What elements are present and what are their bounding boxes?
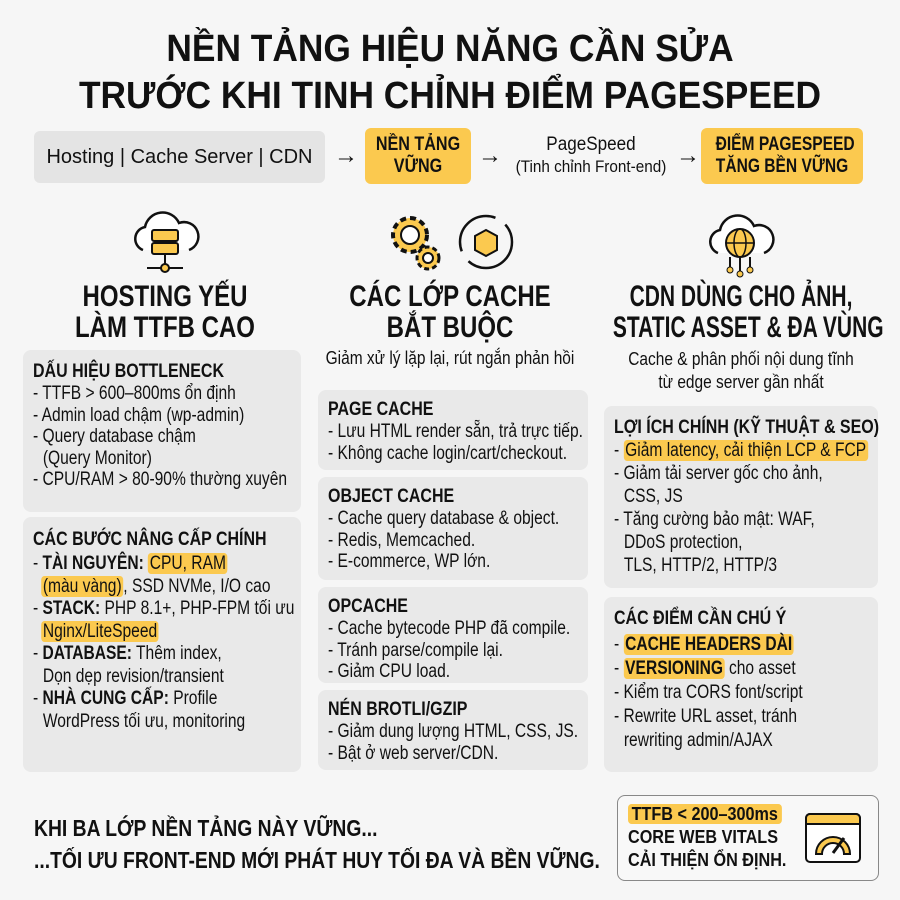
column 2 heading: [349, 280, 551, 344]
panel: CDN benefits: - Giảm tải server gốc cho ảnh,: [614, 463, 823, 484]
panel: upgrade steps: - DATABASE: Thêm index,: [33, 643, 222, 664]
flow: result: ĐIỂM PAGESPEED: [716, 134, 855, 155]
panel: bottleneck signs: [23, 350, 301, 512]
panel: opcache: - Cache bytecode PHP đã compile.: [328, 618, 570, 639]
panel: CDN notes: CÁC ĐIỂM CẦN CHÚ Ý: [614, 607, 786, 629]
panel: brotli: - Giảm dung lượng HTML, CSS, JS.: [328, 721, 578, 742]
bottom conclusion text: KHI BA LỚP NỀN TẢNG NÀY VỮNG...: [34, 815, 377, 841]
flow: pagespeed: PageSpeed: [546, 134, 636, 155]
icon: gears and box: [391, 214, 514, 270]
column 3 subtitle: từ edge server gần nhất: [658, 372, 824, 392]
panel: CDN benefits: LỢI ÍCH CHÍNH (KỸ THUẬT & SEO): [614, 416, 879, 438]
panel: bottleneck signs: - Admin load chậm (wp-admin): [33, 404, 244, 426]
panel: object cache: - Cache query database & object.: [328, 508, 559, 529]
panel: page cache: PAGE CACHE: [328, 398, 433, 420]
panel: upgrade steps: CÁC BƯỚC NÂNG CẤP CHÍNH: [33, 528, 267, 550]
column 2 heading: CÁC LỚP CACHE: [349, 280, 551, 313]
panel: opcache: OPCACHE: [328, 595, 408, 617]
panel: bottleneck signs: - Query database chậm: [33, 426, 196, 447]
bottom conclusion text: [34, 815, 600, 873]
panel: CDN notes: - CACHE HEADERS DÀI: [614, 634, 792, 655]
panel: CDN notes: [604, 597, 878, 772]
result callout box: [617, 795, 879, 881]
arrow: →: [478, 142, 502, 169]
column 1 heading: [75, 280, 255, 344]
panel: brotli: - Bật ở web server/CDN.: [328, 742, 498, 764]
panel: bottleneck signs: (Query Monitor): [43, 448, 152, 468]
flow: foundation: [365, 128, 471, 184]
column 1 heading: HOSTING YẾU: [83, 280, 247, 313]
column 3 heading: STATIC ASSET & ĐA VÙNG: [613, 311, 884, 344]
icon: gauge window: [805, 813, 861, 863]
arrow: →: [676, 142, 700, 169]
panel: opcache: - Tránh parse/compile lại.: [328, 640, 503, 660]
panel: upgrade steps: [23, 517, 301, 772]
panel: CDN notes: rewriting admin/AJAX: [624, 730, 773, 751]
panel: upgrade steps: (màu vàng), SSD NVMe, I/O cao: [43, 576, 270, 596]
icon: cloud globe: [709, 214, 775, 278]
panel: CDN benefits: [604, 406, 878, 588]
panel: upgrade steps: - STACK: PHP 8.1+, PHP-FPM tối ưu: [33, 598, 294, 619]
panel: bottleneck signs: - TTFB > 600–800ms ổn định: [33, 383, 236, 404]
panel: CDN notes: - Rewrite URL asset, tránh: [614, 706, 797, 727]
column 3 subtitle: [628, 349, 854, 392]
flow: hosting box: Hosting | Cache Server | CDN: [46, 146, 313, 168]
column 3 heading: CDN DÙNG CHO ẢNH,: [630, 280, 852, 313]
flow: result: [701, 128, 863, 184]
column 2 subtitle: Giảm xử lý lặp lại, rút ngắn phản hồi: [326, 348, 574, 368]
arrow: →: [334, 142, 358, 169]
panel: CDN notes: - Kiểm tra CORS font/script: [614, 682, 803, 703]
panel: page cache: [318, 390, 588, 470]
column 1 heading: LÀM TTFB CAO: [75, 311, 255, 344]
column 2 heading: BẮT BUỘC: [387, 311, 513, 344]
panel: page cache: - Lưu HTML render sẵn, trả trực tiếp.: [328, 421, 583, 442]
panel: CDN benefits: DDoS protection,: [624, 532, 742, 553]
panel: object cache: - Redis, Memcached.: [328, 530, 475, 550]
panel: object cache: - E-commerce, WP lớn.: [328, 551, 490, 572]
panel: upgrade steps: - TÀI NGUYÊN: CPU, RAM: [33, 553, 226, 574]
flow row: [34, 128, 863, 184]
callout text: CORE WEB VITALS: [628, 827, 778, 847]
panel: brotli: [318, 690, 588, 770]
panel: page cache: - Không cache login/cart/checkout.: [328, 442, 567, 464]
panel: brotli: NÉN BROTLI/GZIP: [328, 698, 467, 720]
panel: CDN notes: - VERSIONING cho asset: [614, 658, 796, 679]
panel: CDN benefits: TLS, HTTP/2, HTTP/3: [624, 555, 777, 576]
flow: foundation: NỀN TẢNG: [376, 134, 460, 155]
panel: upgrade steps: - NHÀ CUNG CẤP: Profile: [33, 688, 217, 709]
flow: foundation: VỮNG: [394, 156, 442, 177]
flow: hosting box: [34, 131, 325, 183]
callout text: TTFB < 200–300ms: [632, 804, 778, 824]
panel: upgrade steps: WordPress tối ưu, monitoring: [43, 710, 245, 732]
panel: object cache: OBJECT CACHE: [328, 485, 454, 507]
panel: upgrade steps: Dọn dẹp revision/transient: [43, 666, 224, 686]
column 3 subtitle: Cache & phân phối nội dung tĩnh: [628, 349, 854, 369]
callout text: [628, 804, 786, 870]
icon: cloud server: [134, 211, 200, 273]
panel: upgrade steps: Nginx/LiteSpeed: [43, 620, 157, 642]
panel: opcache: - Giảm CPU load.: [328, 661, 450, 682]
panel: bottleneck signs: DẤU HIỆU BOTTLENECK: [33, 360, 224, 382]
flow: pagespeed: [516, 134, 666, 176]
bottom conclusion text: ...TỐI ƯU FRONT-END MỚI PHÁT HUY TỐI ĐA VÀ BỀN VỮNG.: [34, 847, 600, 873]
panel: bottleneck signs: - CPU/RAM > 80-90% thường xuyên: [33, 469, 287, 490]
panel: CDN benefits: CSS, JS: [624, 486, 683, 507]
title: TRƯỚC KHI TINH CHỈNH ĐIỂM PAGESPEED: [79, 75, 821, 117]
flow: pagespeed: (Tinh chỉnh Front-end): [516, 157, 666, 176]
callout text: CẢI THIỆN ỔN ĐỊNH.: [628, 850, 786, 870]
panel: CDN benefits: - Tăng cường bảo mật: WAF,: [614, 509, 815, 530]
flow: result: TĂNG BỀN VỮNG: [716, 156, 848, 177]
title: [79, 26, 821, 117]
panel: opcache: [318, 587, 588, 683]
column 3 heading: [613, 280, 884, 344]
panel: CDN benefits: - Giảm latency, cải thiện LCP & FCP: [614, 440, 866, 461]
panel: object cache: [318, 477, 588, 580]
title: NỀN TẢNG HIỆU NĂNG CẦN SỬA: [166, 28, 734, 70]
